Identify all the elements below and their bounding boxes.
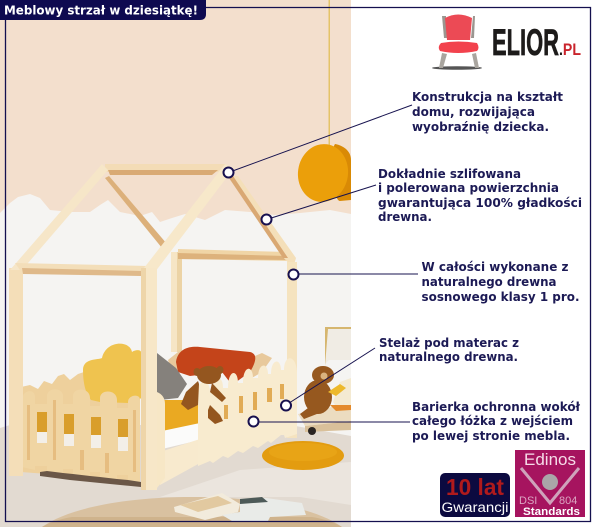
badge: 10 year warranty — [440, 473, 510, 517]
callout 1: house shape: Konstrukcja na kształt — [412, 90, 563, 104]
pendant cord — [328, 0, 330, 146]
badge: 10 year warranty: Gwarancji — [442, 500, 508, 515]
teddy bear on shelf — [300, 366, 334, 419]
icon: chair — [432, 14, 482, 70]
callout 5: safety barrier — [248, 400, 581, 443]
front horizontal beam — [15, 263, 148, 276]
callout 3: pine wood: sosnowego klasy 1 pro. — [422, 290, 580, 304]
bed entry post — [157, 392, 165, 488]
floor — [0, 425, 351, 527]
badge: 10 year warranty: 10 lat — [446, 474, 504, 500]
callout 5: safety barrier: po lewej stronie mebla. — [412, 429, 570, 443]
pillow tan behind — [168, 350, 272, 382]
back roof frame — [105, 164, 296, 352]
callout 4: mattress frame: naturalnego drewna. — [379, 350, 518, 364]
round rug — [42, 497, 342, 527]
callout 1: house shape: domu, rozwijająca — [412, 105, 535, 119]
callout 5: safety barrier: całego łóżka z wejściem — [412, 414, 573, 428]
flower cushion — [83, 344, 141, 403]
badge: Edinos standards: Edinos — [524, 450, 576, 469]
middle post — [141, 268, 157, 490]
plush toy — [333, 378, 351, 408]
callout 1: house shape — [224, 90, 563, 178]
left fence back row — [21, 372, 140, 481]
callout 2: polished surface: i polerowana powierzchnia — [378, 181, 559, 195]
callout 2: polished surface: gwarantująca 100% gładkości — [378, 196, 582, 210]
callout 5: safety barrier: Barierka ochronna wokół — [412, 400, 581, 414]
rear right post — [287, 262, 297, 438]
shadow under left fence — [40, 471, 141, 487]
callout 3: pine wood — [288, 260, 580, 304]
painted white cloud wall — [0, 194, 351, 440]
teddy bear on fence — [181, 366, 226, 424]
pendant lamp — [294, 141, 352, 205]
room photo: bed scene — [0, 0, 352, 527]
floor light patches — [160, 462, 351, 505]
callout 1: house shape: wyobraźnię dziecka. — [412, 120, 549, 134]
pillow red — [176, 347, 255, 385]
badge: Edinos standards: 804 — [559, 495, 577, 507]
badge: Edinos standards: DSI — [519, 495, 537, 507]
callout 3: pine wood: W całości wykonane z — [422, 260, 569, 274]
front left roof slope — [10, 164, 108, 270]
rug lower stripe — [42, 517, 342, 527]
badge: Edinos standards — [515, 450, 585, 518]
open books — [174, 493, 306, 521]
logo: ELIOR.PL — [432, 14, 581, 70]
logo domain: .PL — [559, 40, 581, 59]
wall — [0, 0, 351, 527]
callout 4: mattress frame: Stelaż pod materac z — [379, 336, 519, 350]
callout 3: pine wood: naturalnego drewna — [422, 275, 556, 289]
callout 2: polished surface: Dokładnie szlifowana — [378, 167, 521, 181]
right fence — [198, 358, 297, 466]
grain marks — [27, 400, 136, 473]
floor pouf — [262, 441, 344, 470]
badge: Edinos standards: Standards — [523, 506, 580, 518]
left post — [9, 268, 23, 476]
mattress — [157, 400, 200, 485]
bed side rail — [160, 439, 200, 485]
header label: Meblowy strzał w dziesiątkę! — [4, 2, 198, 18]
callout 2: polished surface: drewna. — [378, 210, 432, 224]
front right roof slope — [144, 164, 234, 272]
callout 4: mattress frame — [281, 336, 519, 410]
fence slots — [224, 384, 284, 419]
left fence front pickets — [22, 389, 140, 482]
cut-out windows — [37, 412, 47, 432]
shelf with toys — [298, 327, 351, 435]
callout 2: polished surface — [262, 167, 582, 224]
pillow grey — [157, 353, 187, 400]
